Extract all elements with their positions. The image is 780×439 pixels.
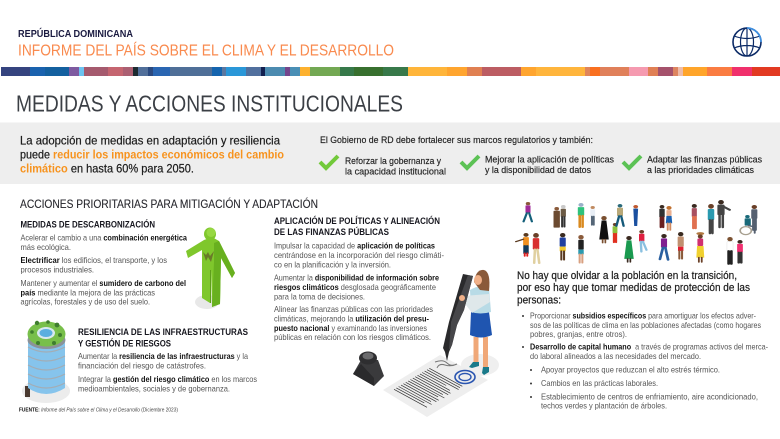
action: data: [485, 154, 614, 175]
inkwell: [353, 360, 384, 386]
action: governance: la capacidad institucional: [345, 166, 446, 176]
panel: decarbonization text: Mantener y aumentar el sumidero de carbono del: [20, 278, 186, 288]
panel: protection heading: personas:: [517, 294, 561, 306]
main heading: MEDIDAS Y ACCIONES INSTITUCIONALES: [16, 90, 403, 116]
panel: infrastructure resilience text: Integrar la gestión del riesgo climático en los marcos: [78, 374, 257, 384]
panel: policy and public finance text: DE LAS FINANZAS PÚBLICAS: [274, 226, 389, 237]
panel: protection measures list: [522, 310, 768, 410]
panel: policy and public finance text: para la toma de decisiones.: [274, 292, 365, 302]
panel: decarbonization text: [20, 218, 187, 306]
pen: [443, 274, 473, 361]
panel: decarbonization text: país mediante la mejora de las prácticas: [20, 288, 155, 298]
action: governance: Reforzar la gobernanza y: [345, 156, 441, 166]
panel: protection measures list: Proporcionar subsidios específicos para amortiguar los efectos adver-: [530, 310, 756, 320]
panel: protection measures list: Apoyar proyectos que reduzcan el alto estrés térmico.: [541, 364, 720, 374]
action: finance: a las prioridades climáticas: [647, 165, 754, 175]
panel: infrastructure resilience text: medioambientales, sociales y de gobernanza.: [78, 384, 230, 394]
hair and head: [474, 270, 489, 291]
panel: infrastructure resilience text: Y GESTIÓN DE RIESGOS: [78, 338, 171, 348]
key message text: puede reducir los impactos económicos del cambio: [20, 148, 284, 162]
document: [383, 355, 488, 417]
action: finance: Adaptar las finanzas públicas: [647, 154, 762, 164]
panel: policy and public finance text: [274, 215, 444, 342]
panel: policy and public finance text: APLICACIÓN DE POLÍTICAS Y ALINEACIÓN: [274, 215, 440, 226]
icon: check 1: [320, 156, 338, 168]
panel: protection measures list: techos verdes y plantación de árboles.: [541, 400, 667, 410]
panel: policy and public finance text: co en la planificación y la inversión.: [274, 260, 391, 270]
icon: green-roof tower: [22, 320, 70, 403]
panel: protection measures list: do laboral alineados a las necesidades del mercado.: [530, 351, 701, 361]
header: report title: INFORME DEL PAÍS SOBRE EL CLIMA Y EL DESARROLLO: [18, 40, 394, 60]
panel: decarbonization text: procesos industriales.: [20, 264, 94, 274]
panel: policy and public finance text: públicas en relación con los riesgos climáticos.: [274, 332, 431, 342]
panel: decarbonization text: MEDIDAS DE DESCARBONIZACIÓN: [20, 218, 155, 230]
panel: policy and public finance text: Alinear las finanzas públicas con las prioridades: [274, 304, 433, 314]
legs and shoes: [474, 337, 478, 363]
panel: protection heading: [517, 270, 750, 306]
panel: grey summary band: [0, 122, 780, 184]
panel: policy and public finance text: Impulsar la capacidad de aplicación de políticas: [274, 240, 435, 250]
panel: policy and public finance text: centrándose en la incorporación del riesgo climáti-: [274, 250, 444, 260]
illustration: crowd of people: [516, 200, 757, 264]
icon: check 2: [461, 156, 479, 168]
icon: green person: [186, 228, 235, 309]
panel: decarbonization text: Electrificar los edificios, el transporte, y los: [20, 255, 167, 265]
panel: infrastructure resilience text: financiación del riesgo de catástrofes.: [78, 360, 206, 370]
panel: policy and public finance text: riesgos climáticos desglosada geográficamente: [274, 282, 436, 292]
action: governance: [345, 156, 446, 176]
illustration: woman signing document with giant pen: [353, 270, 499, 417]
panel: infrastructure resilience text: RESILIENCIA DE LAS INFRAESTRUCTURAS: [78, 327, 248, 337]
panel: protection heading: No hay que olvidar a la población en la transición,: [517, 270, 737, 282]
key message text: La adopción de medidas en adaptación y resiliencia: [20, 134, 280, 148]
panel: policy and public finance text: Aumentar la disponibilidad de información sobre: [274, 272, 439, 282]
panel: protection measures list: pobres, granjas, entre otros).: [530, 329, 627, 339]
section heading: ACCIONES PRIORITARIAS PARA MITIGACIÓN Y ADAPTACIÓN: [20, 196, 318, 211]
key message text: [20, 134, 284, 176]
panel: decarbonization text: más ecológica.: [20, 242, 71, 252]
panel: decarbonization text: Acelerar el cambio a una combinación energética: [20, 232, 187, 242]
panel: policy and public finance text: puesto nacional y examinando las inversiones: [274, 323, 427, 333]
panel: protection heading: por eso hay que tomar medidas de protección de las: [517, 282, 750, 294]
action: data: y la disponibilidad de datos: [485, 165, 591, 175]
icon: check 3: [623, 156, 641, 168]
panel: decarbonization text: agrícolas, forestales y de uso del suelo.: [20, 296, 150, 306]
skirt: [470, 312, 492, 338]
colour stripe: [1, 67, 780, 76]
panel: policy and public finance text: climáticas, mejorando la utilización del presu-: [274, 314, 429, 324]
action: data: Mejorar la aplicación de políticas: [485, 154, 614, 164]
source note: FUENTE: Informe del País sobre el Clima y el Desarrollo (Diciembre 2023): [19, 408, 178, 414]
header: country label: REPÚBLICA DOMINICANA: [18, 27, 133, 40]
shirt: [470, 286, 491, 314]
key message text: climático en hasta 60% para 2050.: [20, 162, 194, 176]
action: finance: [647, 154, 762, 175]
icon: World Bank globe logo: [733, 28, 761, 56]
panel: infrastructure resilience text: Aumentar la resiliencia de las infraestructuras y la: [78, 351, 248, 361]
government intro text: El Gobierno de RD debe fortalecer sus marcos regulatorios y también:: [320, 135, 593, 145]
panel: protection measures list: Establecimiento de centros de enfriamiento, aire acondicionado,: [541, 392, 758, 402]
panel: protection measures list: Cambios en las prácticas laborales.: [541, 378, 658, 388]
panel: infrastructure resilience text: [78, 327, 257, 394]
